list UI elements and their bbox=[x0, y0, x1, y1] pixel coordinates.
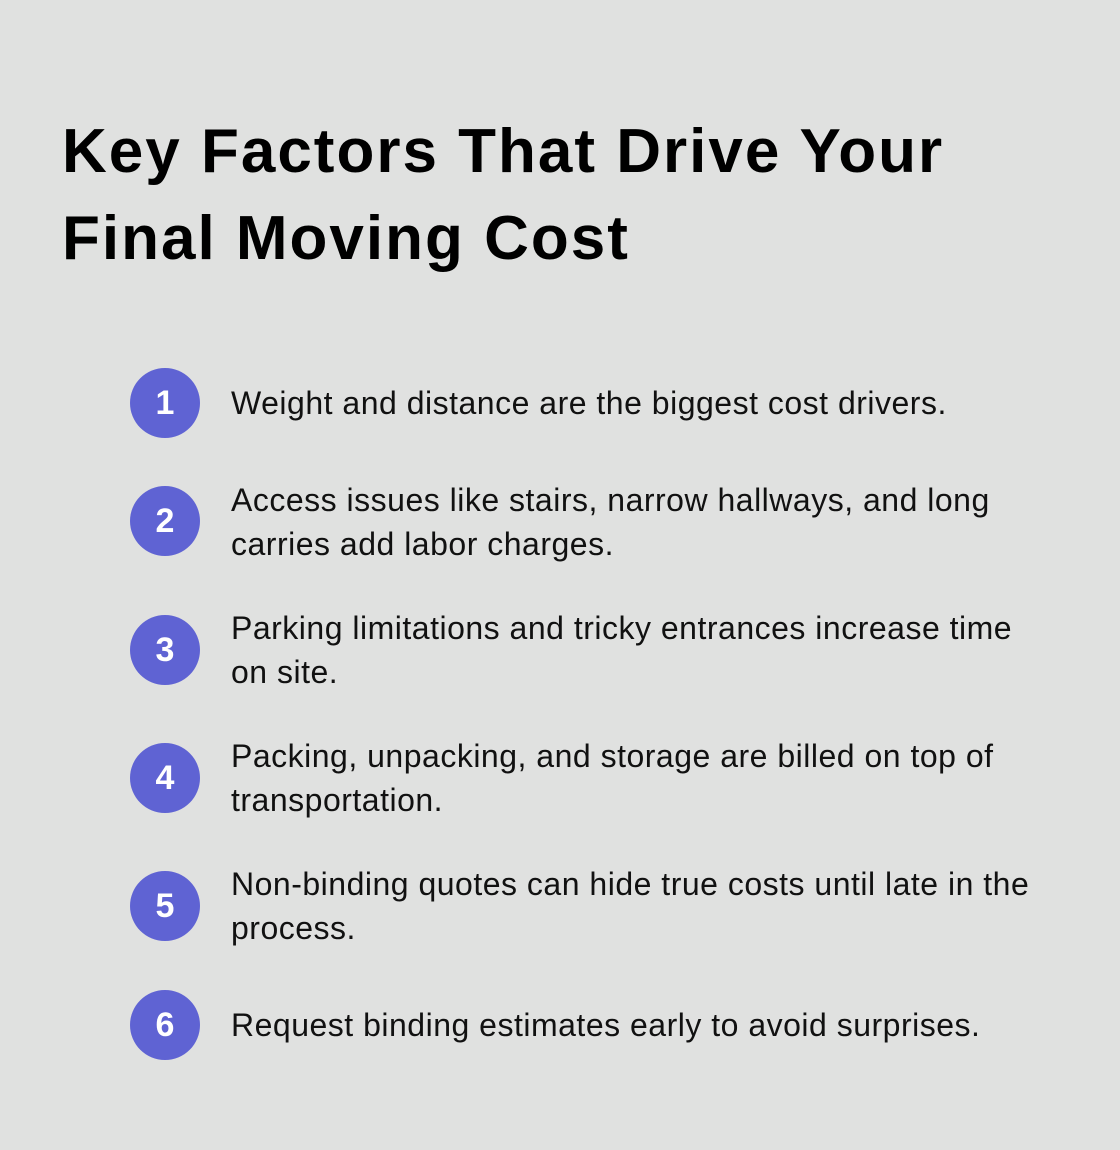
item 2: carries add labor charges. bbox=[231, 526, 614, 562]
item 6 bbox=[130, 990, 980, 1060]
item 1: Weight and distance are the biggest cost drivers. bbox=[231, 385, 947, 421]
item 5: process. bbox=[231, 910, 356, 946]
item 3: Parking limitations and tricky entrances increase time bbox=[231, 610, 1012, 646]
item 6: Request binding estimates early to avoid surprises. bbox=[231, 1007, 980, 1043]
item 6: 6 bbox=[156, 1006, 174, 1044]
item 1: 1 bbox=[156, 384, 174, 422]
item 1 bbox=[130, 368, 947, 438]
item 3: on site. bbox=[231, 654, 338, 690]
item 2: 2 bbox=[156, 502, 174, 540]
item 3: 3 bbox=[156, 631, 174, 669]
title: Final Moving Cost bbox=[62, 204, 630, 273]
item 2 bbox=[130, 482, 990, 562]
item 4: 4 bbox=[156, 759, 174, 797]
item 4 bbox=[130, 738, 994, 818]
title: Key Factors That Drive Your bbox=[62, 117, 944, 186]
item 4: transportation. bbox=[231, 782, 443, 818]
item 5: 5 bbox=[156, 887, 174, 925]
item 5 bbox=[130, 866, 1029, 946]
item 3 bbox=[130, 610, 1012, 690]
title bbox=[62, 117, 944, 273]
item 2: Access issues like stairs, narrow hallways, and long bbox=[231, 482, 990, 518]
item 5: Non-binding quotes can hide true costs until late in the bbox=[231, 866, 1029, 902]
item 4: Packing, unpacking, and storage are billed on top of bbox=[231, 738, 994, 774]
